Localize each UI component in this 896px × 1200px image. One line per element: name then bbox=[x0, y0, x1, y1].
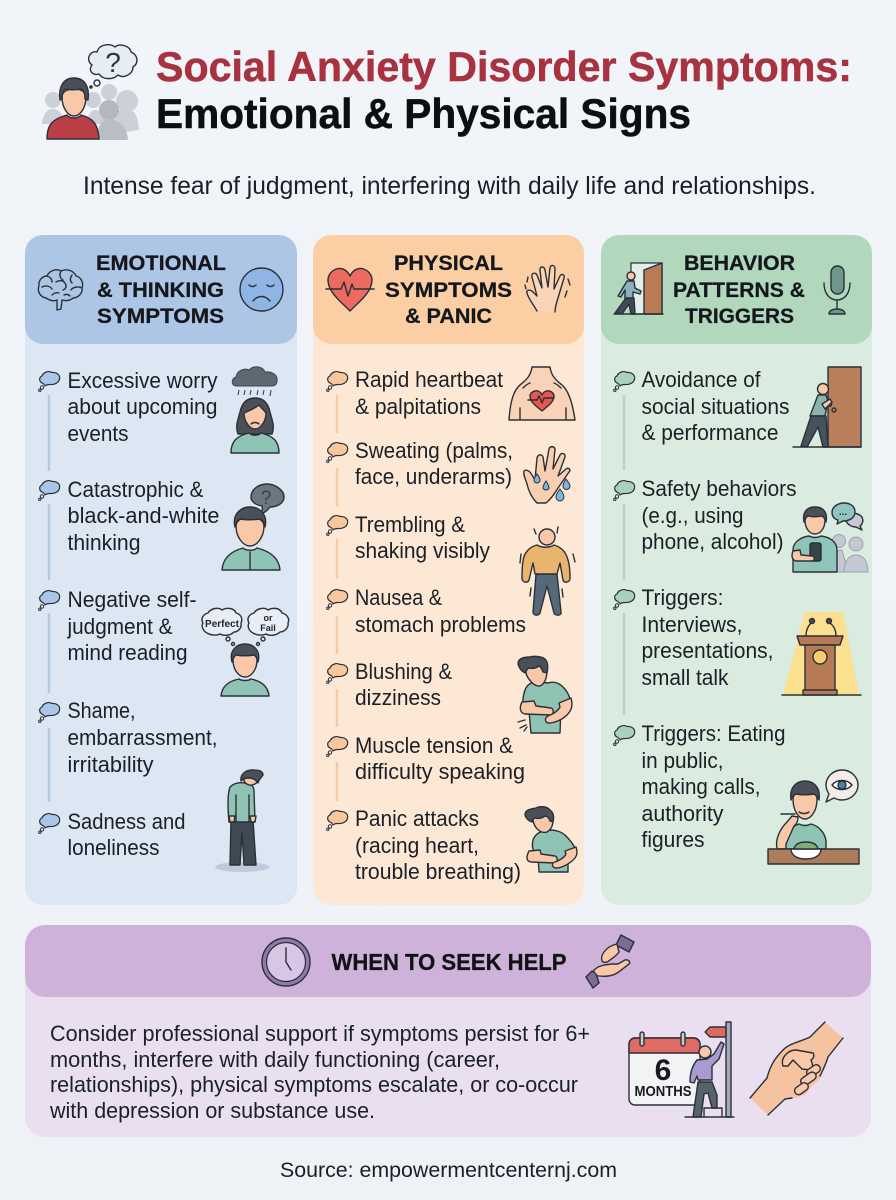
icon: man with question bubble bbox=[222, 484, 284, 570]
text: when to seek help body bbox=[49, 1021, 590, 1123]
source: Source: empowermentcenternj.com bbox=[280, 1159, 617, 1182]
heading: physical: PHYSICAL bbox=[394, 251, 503, 275]
title: Emotional & Physical Signs bbox=[156, 90, 691, 137]
bullet: avoidance: social situations bbox=[642, 394, 790, 419]
bullet: panic attacks bbox=[327, 806, 521, 884]
icon: man using phone with crowd bbox=[792, 503, 868, 572]
icon: sweating hand with drops bbox=[524, 447, 570, 503]
panel header: physical bbox=[313, 235, 584, 344]
bullet: avoidance bbox=[614, 367, 790, 445]
bullet: trembling bbox=[327, 512, 490, 563]
bullet: negative self-judgment: judgment & bbox=[67, 614, 173, 639]
bullet: trembling: Trembling & bbox=[355, 512, 465, 537]
panel: behavior patterns and triggers bbox=[601, 235, 872, 905]
panel: emotional and thinking symptoms bbox=[25, 235, 297, 905]
bullet: rapid heartbeat bbox=[327, 367, 503, 419]
icon: person leaving through door bbox=[614, 263, 663, 314]
icon: anxious person with crowd and question thought bbox=[42, 45, 139, 140]
icon: brain bbox=[38, 270, 83, 310]
title: Social Anxiety Disorder Symptoms: bbox=[156, 43, 852, 90]
icon: person with perfect or fail thoughts: Fail bbox=[260, 623, 276, 633]
panel: when to seek help bbox=[25, 925, 871, 1137]
icon: heart with pulse bbox=[326, 268, 374, 311]
icon: anxious person with crowd and question thought: ? bbox=[105, 47, 121, 78]
bullet: blushing: Blushing & bbox=[355, 659, 452, 684]
connector lines bbox=[48, 395, 50, 802]
bullet: shame: irritability bbox=[68, 752, 154, 777]
bullet: nausea: stomach problems bbox=[355, 612, 526, 637]
icon: six months calendar with climbing person bbox=[629, 1022, 734, 1117]
text: when to seek help body: Consider professional support if symptoms persist for 6+ bbox=[50, 1021, 590, 1046]
bullet: sadness bbox=[39, 809, 185, 860]
bullet: excessive worry: Excessive worry bbox=[68, 368, 218, 393]
text: when to seek help body: with depression or substance use. bbox=[49, 1098, 375, 1123]
bullet: avoidance: Avoidance of bbox=[642, 367, 761, 392]
heading: physical bbox=[385, 251, 512, 328]
heading: physical: SYMPTOMS bbox=[385, 278, 512, 302]
panel: physical symptoms and panic bbox=[313, 235, 584, 905]
icon: person with perfect or fail thoughts: or bbox=[264, 613, 273, 623]
icon: man hiding behind door bbox=[793, 367, 861, 447]
bullet: catastrophic thinking: black-and-white bbox=[68, 503, 220, 528]
bullet: safety behaviors bbox=[614, 476, 796, 554]
bullet: shame: Shame, bbox=[68, 698, 136, 723]
bullet: muscle tension: difficulty speaking bbox=[355, 759, 525, 784]
text: when to seek help body: relationships), physical symptoms escalate, or co-occur bbox=[50, 1072, 578, 1097]
icon: clock bbox=[262, 938, 310, 986]
bullet: panic attacks: (racing heart, bbox=[355, 833, 479, 858]
bullet: excessive worry bbox=[39, 368, 217, 446]
bullet: sweating bbox=[327, 438, 513, 489]
bullet: excessive worry: events bbox=[68, 421, 128, 446]
heading: emotional: SYMPTOMS bbox=[97, 304, 224, 328]
icon: person with perfect or fail thoughts: Perfect bbox=[205, 619, 240, 630]
bullet: catastrophic thinking: thinking bbox=[68, 530, 140, 555]
bullet: negative self-judgment: Negative self- bbox=[68, 587, 196, 612]
bullet: sweating: face, underarms) bbox=[355, 464, 512, 489]
bullet: muscle tension: Muscle tension & bbox=[355, 733, 513, 758]
bullet: shame: embarrassment, bbox=[68, 725, 218, 750]
subtitle: Intense fear of judgment, interfering with daily life and relationships. bbox=[83, 172, 816, 200]
bullet: shame bbox=[39, 698, 217, 777]
icon: man holding stomach bbox=[518, 656, 572, 733]
bullet: safety behaviors: (e.g., using bbox=[642, 503, 744, 528]
icon: microphone bbox=[824, 266, 850, 314]
bullet: sadness: loneliness bbox=[68, 835, 160, 860]
icon: trembling person bbox=[520, 527, 575, 615]
bullet: triggers interviews: Interviews, bbox=[642, 612, 742, 637]
bullet: nausea bbox=[327, 585, 526, 637]
heading: emotional: EMOTIONAL bbox=[96, 251, 226, 275]
bullet: muscle tension bbox=[327, 733, 525, 784]
bullet: triggers interviews: Triggers: bbox=[642, 585, 724, 610]
icon: man with question bubble: ? bbox=[261, 488, 271, 509]
bullet: avoidance: & performance bbox=[642, 420, 778, 445]
icon: chest with heart bbox=[509, 367, 575, 420]
bullet: rapid heartbeat: Rapid heartbeat bbox=[355, 367, 503, 392]
bullet: negative self-judgment: mind reading bbox=[68, 640, 188, 665]
bullet: negative self-judgment bbox=[39, 587, 196, 665]
icon: man eating with watching eye bbox=[768, 770, 859, 864]
heading: physical: & PANIC bbox=[405, 304, 492, 328]
bullet: triggers eating: Triggers: Eating bbox=[642, 721, 786, 746]
bullet: sweating: Sweating (palms, bbox=[355, 438, 513, 463]
icon: helping hands bbox=[586, 935, 634, 988]
icon: six months calendar with climbing person: MONTHS bbox=[634, 1083, 692, 1100]
panel header: emotional bbox=[25, 235, 297, 344]
icon: sad standing man bbox=[215, 770, 269, 872]
connector lines bbox=[623, 395, 625, 715]
bullet: sadness: Sadness and bbox=[68, 809, 186, 834]
heading: emotional bbox=[96, 251, 226, 328]
bullet: triggers interviews: small talk bbox=[642, 665, 729, 690]
bullet: triggers eating: figures bbox=[642, 827, 704, 852]
icon: podium in spotlight bbox=[782, 612, 861, 695]
bullet: rapid heartbeat: & palpitations bbox=[355, 394, 481, 419]
icon: worried woman under rain cloud bbox=[231, 367, 279, 453]
heading: behavior: TRIGGERS bbox=[685, 304, 794, 328]
heading: behavior: PATTERNS & bbox=[673, 278, 805, 302]
icon: shaking hand bbox=[525, 265, 570, 312]
bullet: blushing bbox=[327, 659, 452, 710]
icon: person with perfect or fail thoughts bbox=[202, 608, 289, 696]
bullet: blushing: dizziness bbox=[355, 685, 441, 710]
bullet: triggers interviews: presentations, bbox=[642, 638, 774, 663]
bullet: triggers eating: making calls, bbox=[642, 774, 760, 799]
icon: man using phone with crowd: ... bbox=[839, 507, 847, 518]
panel header: behavior bbox=[601, 235, 872, 344]
title bbox=[156, 43, 852, 137]
icon: man having panic attack bbox=[525, 807, 577, 872]
bullet: safety behaviors: phone, alcohol) bbox=[642, 529, 784, 554]
bullet: excessive worry: about upcoming bbox=[68, 394, 218, 419]
bullet: catastrophic thinking bbox=[39, 477, 219, 555]
bullet: triggers eating: authority bbox=[642, 801, 724, 826]
heading: behavior: BEHAVIOR bbox=[684, 251, 795, 275]
bullet: panic attacks: trouble breathing) bbox=[355, 859, 521, 884]
heading: behavior bbox=[673, 251, 805, 328]
icon: sad face bbox=[240, 268, 283, 311]
bullet: safety behaviors: Safety behaviors bbox=[642, 476, 796, 501]
bullet: panic attacks: Panic attacks bbox=[355, 806, 479, 831]
text: when to seek help body: months, interfere with daily functioning (career, bbox=[50, 1047, 500, 1072]
icon: six months calendar with climbing person: 6 bbox=[655, 1054, 671, 1087]
heading: when to seek help: WHEN TO SEEK HELP bbox=[332, 949, 566, 975]
heading: emotional: & THINKING bbox=[97, 278, 224, 302]
bullet: triggers interviews bbox=[614, 585, 774, 690]
bullet: catastrophic thinking: Catastrophic & bbox=[68, 477, 204, 502]
panel header: when to seek help bbox=[25, 925, 871, 997]
bullet: trembling: shaking visibly bbox=[355, 538, 490, 563]
connector lines bbox=[336, 395, 338, 801]
bullet: triggers eating bbox=[614, 721, 786, 852]
icon: clasped hands bbox=[750, 1022, 843, 1115]
bullet: nausea: Nausea & bbox=[355, 585, 442, 610]
bullet: triggers eating: in public, bbox=[642, 748, 724, 773]
